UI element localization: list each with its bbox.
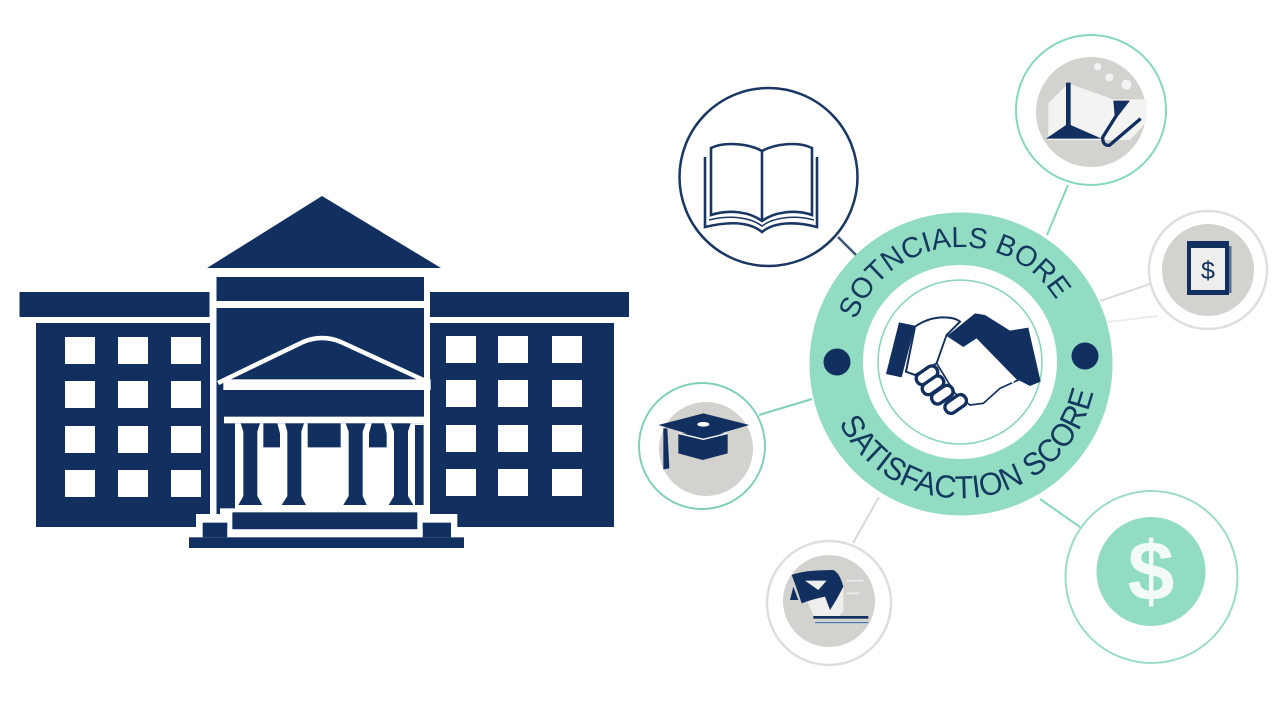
icon: open book (680, 88, 858, 266)
icon: laptop with map (767, 541, 891, 665)
icon: dollar coin: $ (1128, 524, 1174, 618)
badge text: top arc: SOTNCIALS BORE (840, 227, 1072, 317)
icon: dollar document (1149, 211, 1267, 329)
icon: graduation cap (639, 383, 765, 509)
central satisfaction score badge (810, 212, 1112, 516)
icon: dollar coin (1066, 491, 1238, 663)
badge text: bottom arc: SATISFACTION SCORE (842, 388, 1094, 498)
icon: lamp and pen (1016, 35, 1166, 185)
icon: handshake (886, 313, 1041, 416)
icon: university building (20, 196, 629, 548)
icon: dollar document: $ (1201, 257, 1215, 285)
connector lines (759, 185, 1158, 543)
